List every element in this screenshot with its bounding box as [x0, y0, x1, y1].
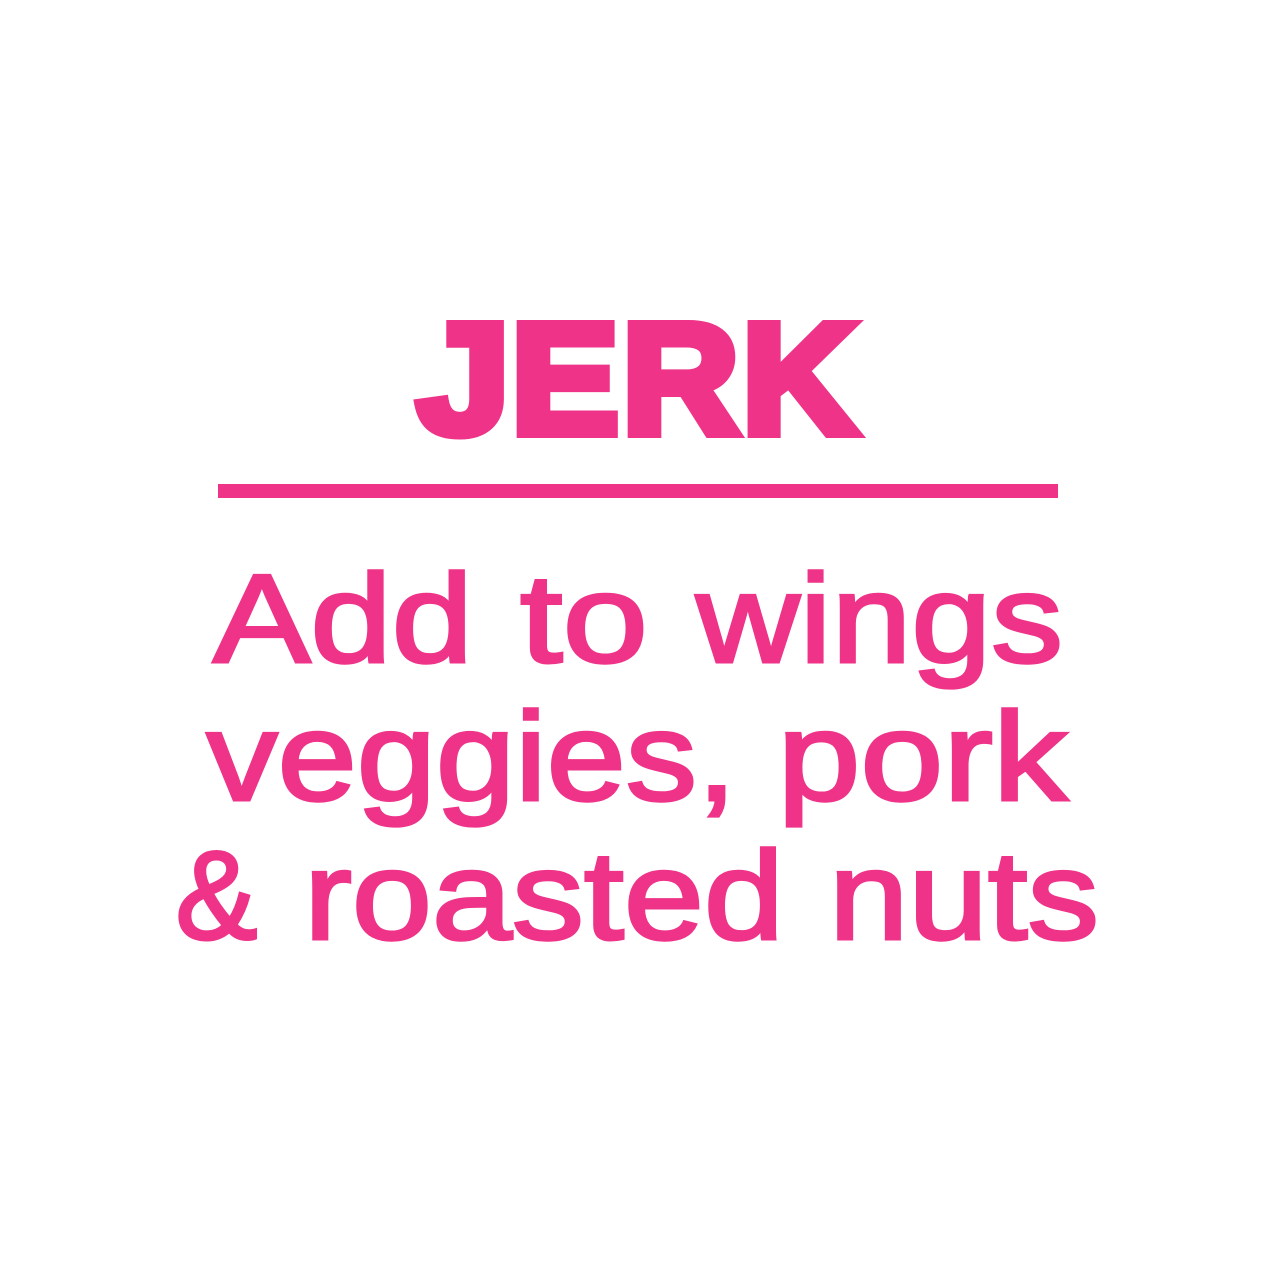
text block: usage suggestions: Add [213, 548, 473, 689]
text block: usage suggestions: pork [778, 686, 1069, 827]
text block: usage suggestions [176, 548, 1099, 966]
title [417, 292, 857, 467]
text block: usage suggestions: nuts [829, 825, 1099, 966]
title: J [417, 292, 510, 467]
title: R [622, 292, 739, 467]
text block: usage suggestions: to [520, 548, 648, 689]
text block: usage suggestions: wings [695, 548, 1063, 689]
text block: usage suggestions: veggies, [206, 686, 736, 827]
divider rule [218, 484, 1058, 498]
title: K [742, 292, 857, 467]
text block: usage suggestions: roasted [304, 825, 784, 966]
text block: usage suggestions: & [176, 825, 258, 966]
title: E [511, 292, 619, 467]
